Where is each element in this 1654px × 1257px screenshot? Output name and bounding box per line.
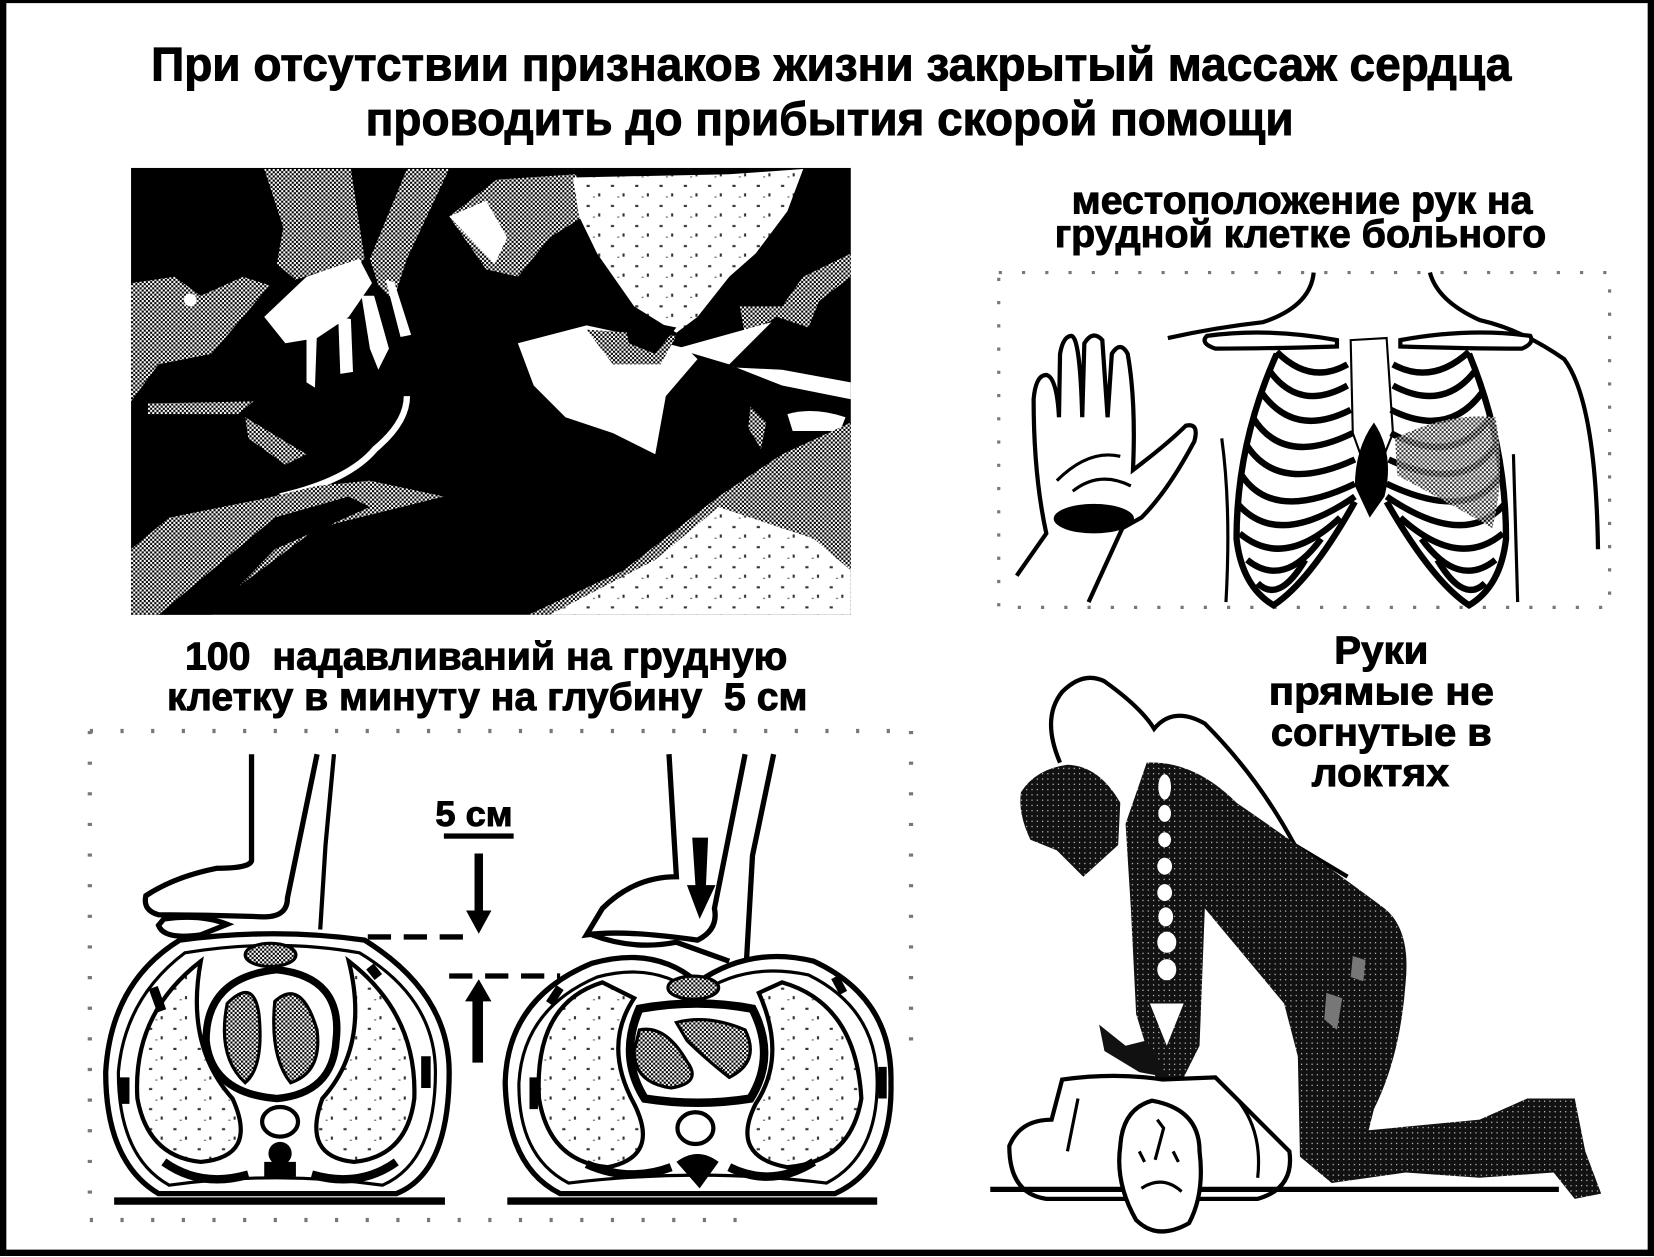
palm heel mark <box>1054 504 1134 533</box>
heading: straight arms: согнутые в <box>1271 712 1492 755</box>
title: При отсутствии признаков жизни закрытый массаж сердца <box>151 38 1512 91</box>
table lines <box>114 1198 877 1205</box>
hand <box>1017 336 1196 602</box>
white sleeve shape <box>449 174 583 277</box>
right lung <box>316 961 414 1162</box>
left background strip <box>131 277 270 401</box>
right chest section <box>505 956 891 1194</box>
heading: hand position: грудной клетке больного <box>1055 213 1546 256</box>
patient shoulders <box>1009 1076 1290 1199</box>
left arm and hand <box>145 754 334 936</box>
depth arrows and dashed levels <box>466 853 491 934</box>
depth label: 5 см <box>435 795 513 834</box>
spine <box>262 1107 298 1137</box>
heading: straight arms: Руки <box>1334 629 1428 672</box>
compression arrow on right arm <box>687 838 716 919</box>
ground line <box>990 1187 1559 1192</box>
right side highlights <box>740 254 851 336</box>
body weight arc <box>1051 678 1348 877</box>
clavicles <box>1205 333 1337 349</box>
panel: kneeling rescuer over patient <box>990 678 1601 1231</box>
rescuer arm <box>264 169 365 280</box>
panel: photo of chest compressions <box>131 168 851 615</box>
torso and leg <box>1126 763 1601 1199</box>
heading: compression rate: клетку в минуту на глубину 5 см <box>167 676 807 719</box>
bottom right cloth <box>528 423 851 615</box>
rescuer hand <box>1099 1025 1168 1077</box>
right arm and hand <box>587 754 774 967</box>
sternum <box>1351 338 1393 486</box>
leg <box>131 481 444 615</box>
scan noise frame <box>999 273 1610 607</box>
sternum <box>668 976 719 999</box>
heading: straight arms: прямые не <box>1269 671 1494 714</box>
heading: straight arms <box>1269 629 1494 795</box>
flattened heart <box>630 1003 764 1103</box>
spine <box>677 1112 713 1144</box>
left lung <box>137 961 241 1162</box>
panel: hand and rib cage diagram <box>999 273 1610 607</box>
left lung <box>539 982 643 1167</box>
heart sac <box>206 970 337 1099</box>
sternum <box>245 943 296 967</box>
title <box>151 38 1512 146</box>
highlights on body <box>1324 956 1365 1030</box>
patient head <box>1119 1101 1201 1231</box>
curved white line <box>280 396 407 496</box>
right lung <box>747 982 861 1167</box>
right ribs <box>1387 352 1506 605</box>
palm creases <box>1057 455 1131 491</box>
left chest section <box>106 934 449 1194</box>
white spine markers <box>1150 774 1184 1046</box>
scan noise frame <box>90 731 911 1220</box>
heart shading <box>1395 416 1500 528</box>
heading: compression rate <box>167 636 807 719</box>
title: проводить до прибытия скорой помощи <box>366 93 1294 146</box>
speckled shirt <box>573 169 803 333</box>
neck and shoulders <box>1168 273 1314 338</box>
panel: chest cross-sections <box>90 731 911 1220</box>
left ribs <box>1237 352 1355 605</box>
heading: hand position: местоположение рук на <box>1072 179 1533 222</box>
heading: straight arms: локтях <box>1312 752 1449 795</box>
heading: hand position <box>1055 179 1546 256</box>
head <box>1020 765 1120 877</box>
heading: compression rate: 100 надавливаний на грудную <box>185 636 787 679</box>
face <box>518 325 698 454</box>
hand with fingers <box>264 259 411 388</box>
